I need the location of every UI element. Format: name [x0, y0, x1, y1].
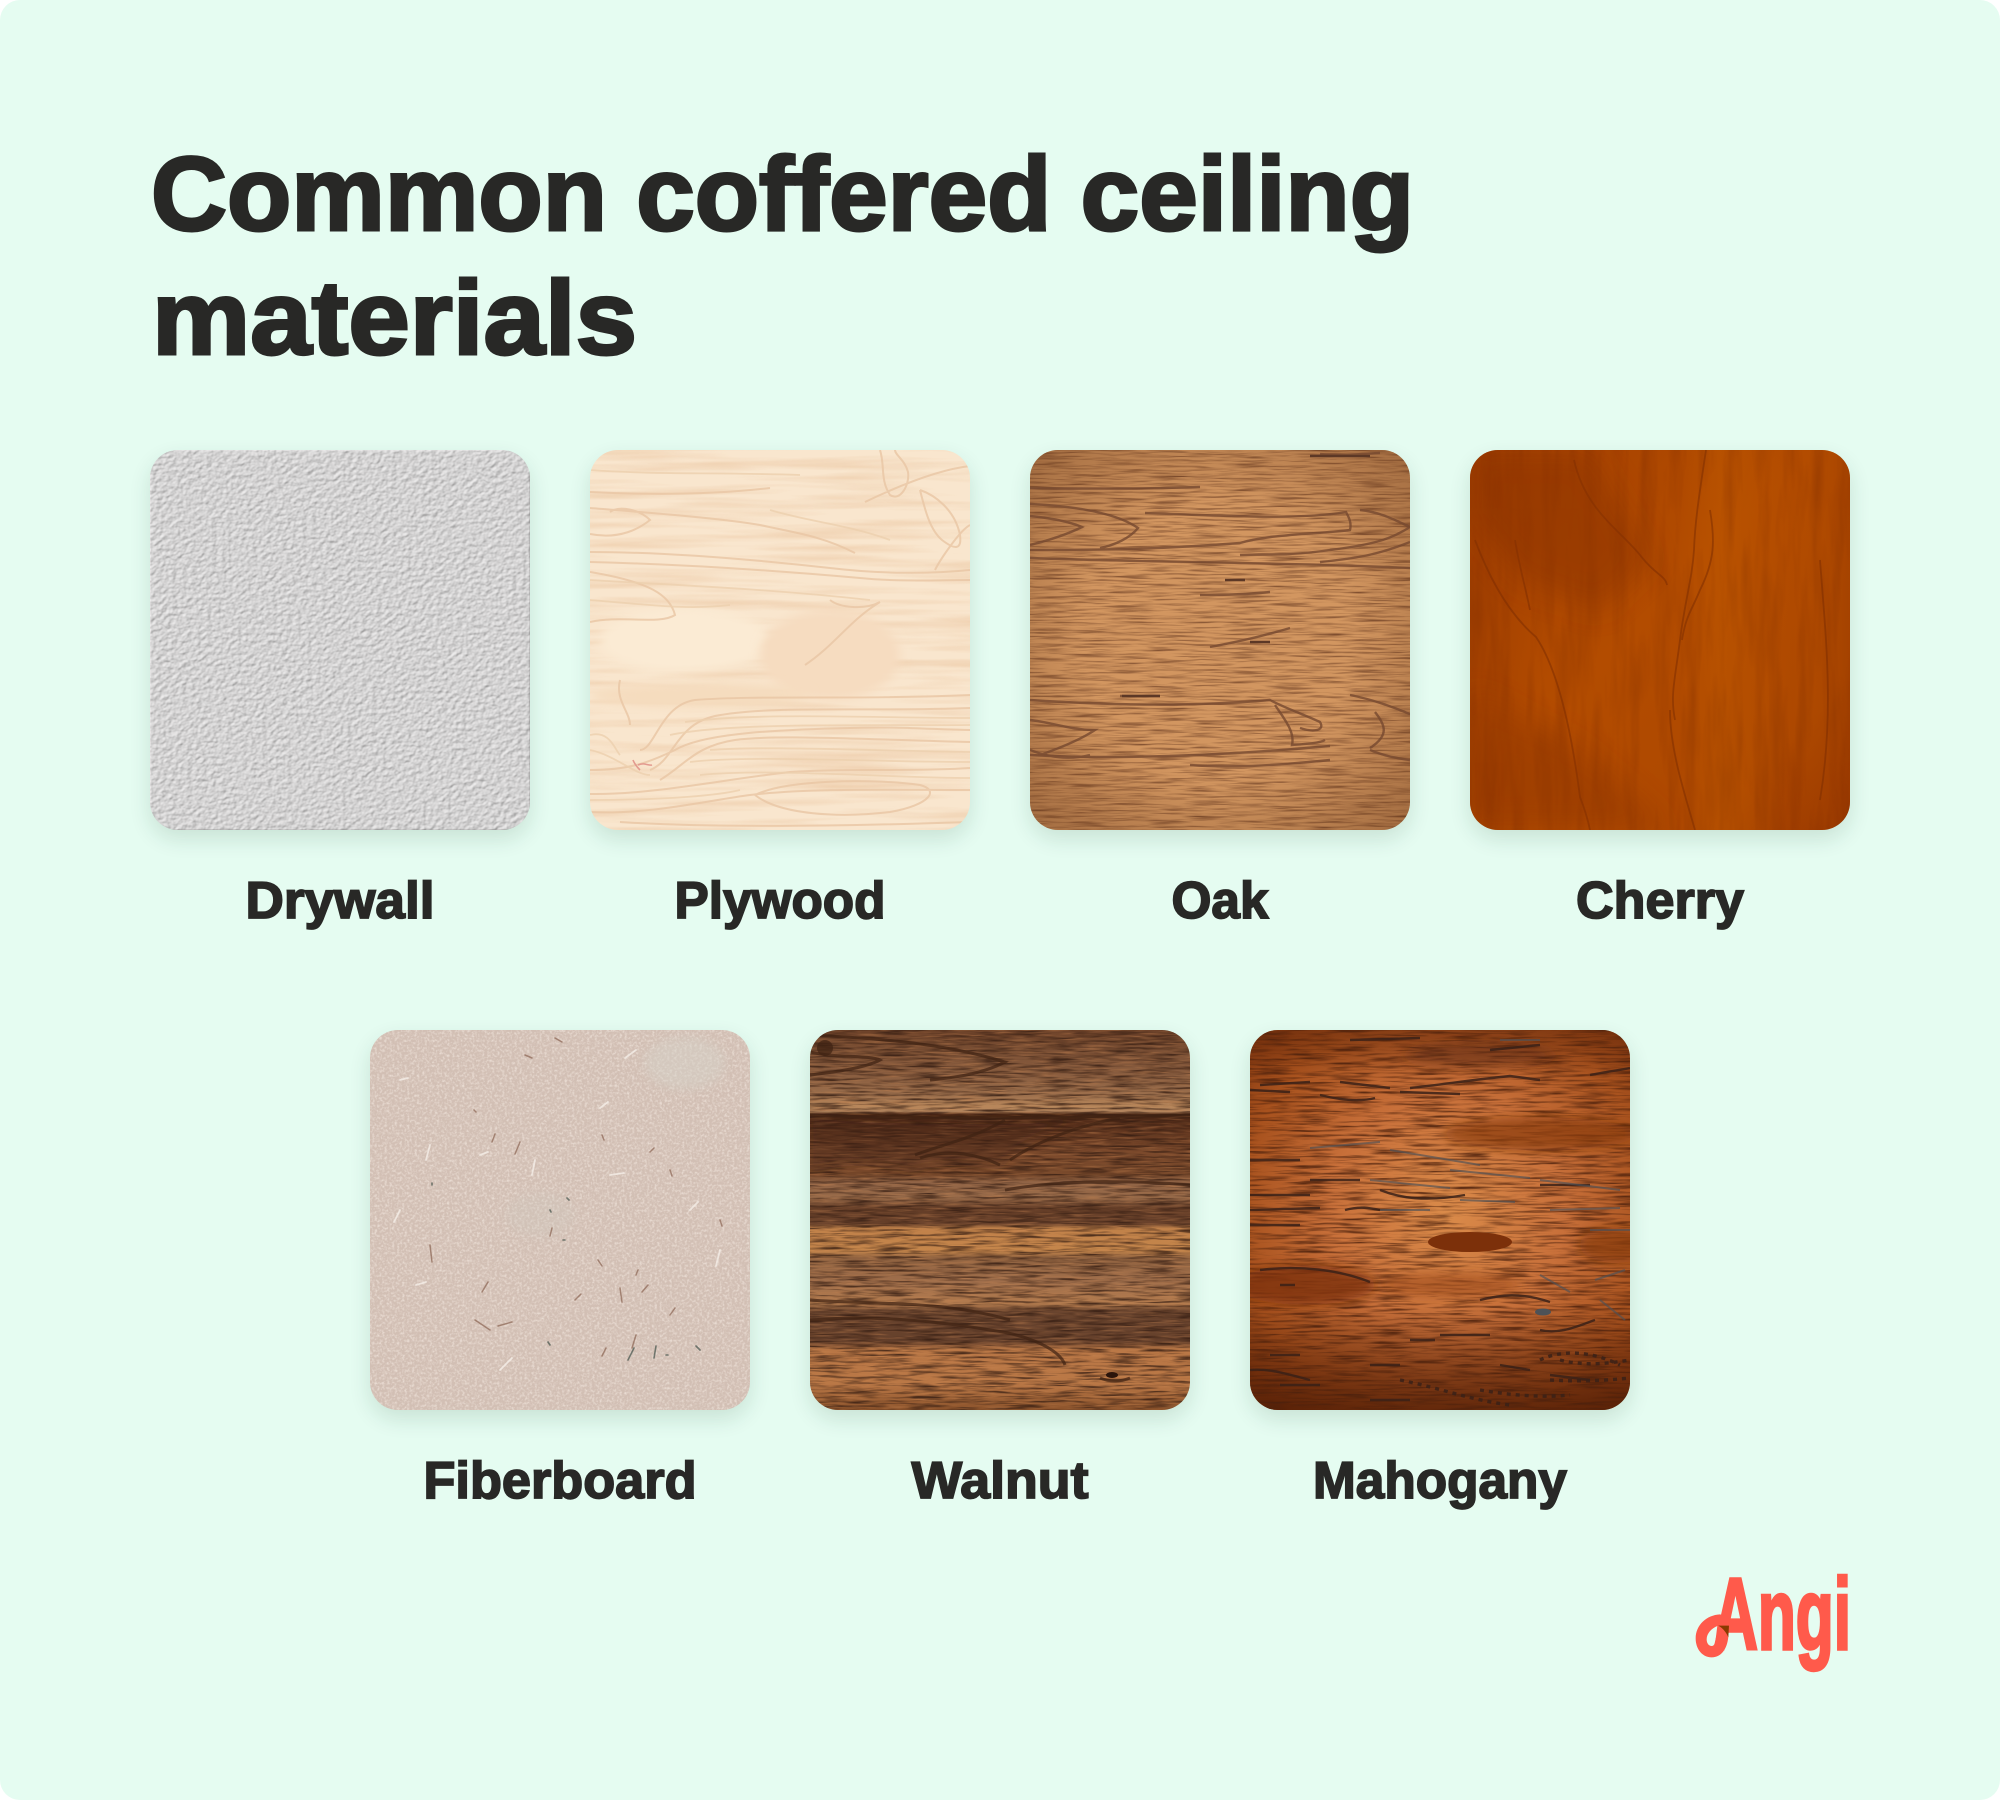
logo: Angi	[1696, 1559, 1851, 1671]
card: Drywall	[150, 450, 530, 930]
swatch: fiberboard texture	[370, 1030, 750, 1419]
logo wordmark: Angi	[1713, 1559, 1851, 1671]
title	[151, 136, 1414, 377]
logo fold shadow	[1718, 1626, 1729, 1637]
swatch: mahogany texture	[1235, 1030, 1650, 1419]
swatch: walnut texture	[810, 1030, 1190, 1419]
card: Walnut	[810, 1030, 1190, 1510]
swatch: cherry texture	[1470, 450, 1850, 839]
label: Mahogany: Mahogany	[1313, 1452, 1567, 1510]
swatch: plywood texture	[590, 450, 970, 839]
card: Cherry	[1470, 450, 1850, 930]
label: Walnut: Walnut	[912, 1452, 1088, 1510]
label: Plywood: Plywood	[674, 872, 886, 930]
label: Oak: Oak	[1172, 872, 1269, 930]
card: Fiberboard	[370, 1030, 750, 1510]
label: Fiberboard: Fiberboard	[424, 1452, 696, 1510]
swatch: oak texture	[1030, 450, 1410, 839]
card: Oak	[1030, 450, 1410, 930]
label: Cherry: Cherry	[1576, 872, 1744, 930]
title line 2: materials	[152, 260, 637, 377]
swatch: drywall texture	[150, 450, 530, 839]
card: Mahogany	[1235, 1030, 1650, 1510]
logo flourish on the A	[1696, 1614, 1729, 1657]
title line 1: Common coffered ceiling	[151, 136, 1414, 253]
label: Drywall: Drywall	[246, 872, 434, 930]
card: Plywood	[590, 450, 970, 930]
